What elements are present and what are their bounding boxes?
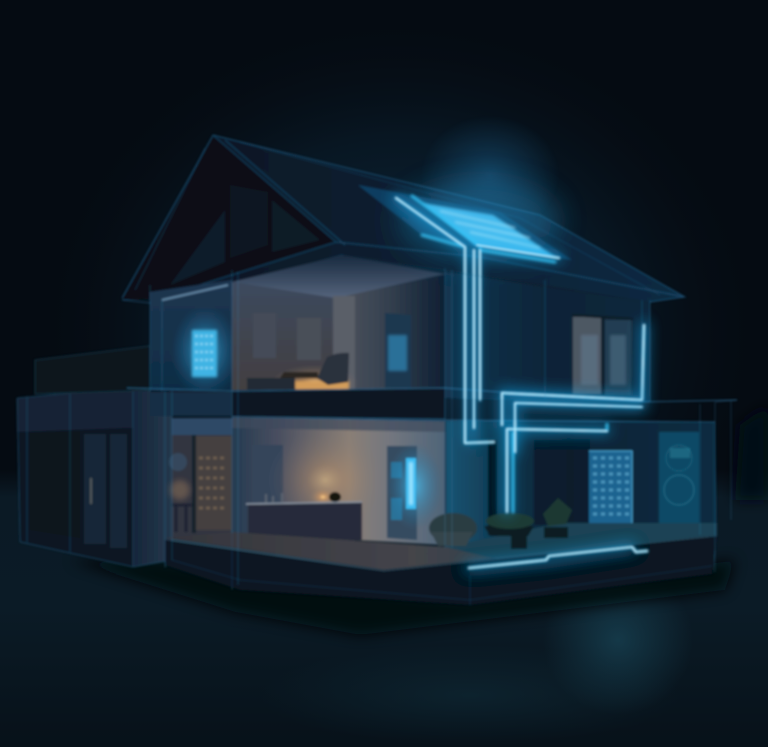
right screen [659, 432, 699, 525]
wireframe outlines [150, 268, 737, 585]
plants on deck [429, 498, 572, 549]
left wing lower floor [17, 388, 172, 567]
lower right wall [446, 421, 717, 548]
upper right window [572, 315, 633, 396]
lower left room [169, 418, 232, 538]
foundation [165, 530, 717, 605]
glowing wall panel [589, 451, 632, 527]
upper right wall [445, 272, 650, 402]
upper left wall with glowing panel [150, 280, 239, 398]
kitchen island [248, 502, 362, 547]
solar panel on roof [358, 180, 572, 260]
roof [122, 135, 685, 304]
middle slab [127, 388, 737, 422]
armchair [317, 353, 349, 385]
deck floor [165, 523, 717, 571]
terrace railing [35, 346, 163, 394]
doorway with fridge glow [387, 446, 417, 540]
upper room interior [232, 255, 445, 401]
roof top glow [420, 115, 560, 235]
ceiling [232, 255, 445, 298]
ground shadow [70, 560, 735, 635]
neon pipes [396, 196, 647, 568]
lower main room interior [232, 417, 445, 547]
